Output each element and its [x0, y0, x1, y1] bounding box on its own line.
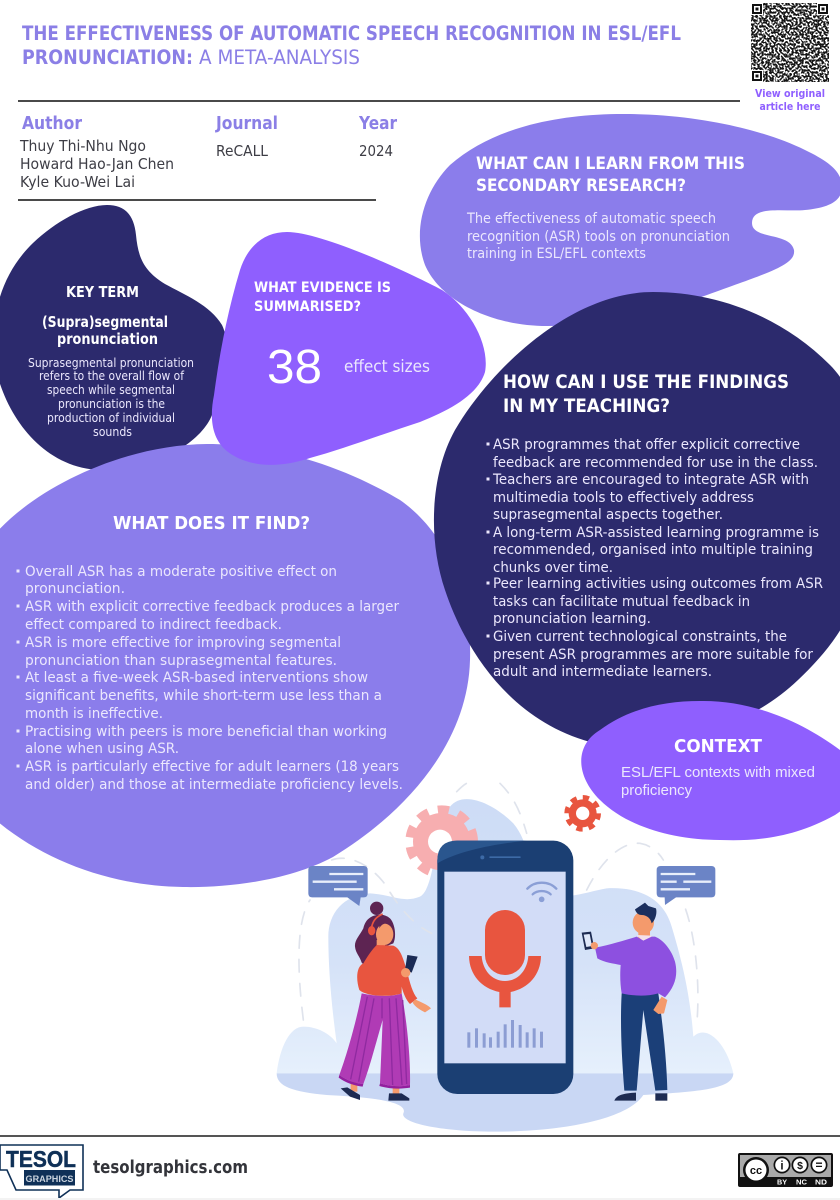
title: THE EFFECTIVENESS OF AUTOMATIC SPEECH RECOGNITION IN ESL/EFL — [22, 22, 681, 45]
findings list: ASR with explicit corrective feedback produces a larger — [25, 599, 399, 615]
panel: what can I learn: recognition (ASR) tools on pronunciation — [467, 229, 730, 245]
findings list: ASR is more effective for improving segmental — [25, 635, 341, 651]
metadata: journal: Journal — [215, 114, 278, 134]
teaching recommendations list: chunks over time. — [493, 560, 613, 576]
metadata: author — [19, 114, 174, 191]
QR caption: View original — [755, 87, 825, 100]
teaching recommendations list: Given current technological constraints, the — [493, 629, 787, 645]
metadata: author: Thuy Thi-Nhu Ngo — [19, 137, 146, 155]
teaching recommendations list: ASR programmes that offer explicit corrective — [493, 437, 800, 453]
panel: key term — [0, 205, 227, 470]
metadata: year — [358, 114, 397, 160]
website: tesolgraphics.com — [93, 1157, 248, 1178]
metadata: year: Year — [358, 114, 397, 134]
panel: what can I learn: The effectiveness of automatic speech — [466, 211, 716, 227]
panel: what evidence is summarised — [212, 232, 486, 465]
findings list: pronunciation. — [25, 581, 125, 597]
panel: what evidence is summarised: SUMMARISED? — [254, 299, 361, 315]
findings list: Practising with peers is more beneficial than working — [25, 724, 387, 740]
teaching recommendations list — [486, 437, 823, 680]
findings list: month is ineffective. — [25, 706, 163, 722]
logo: TESOL Graphics: TESOL — [6, 1146, 76, 1172]
title: PRONUNCIATION: — [22, 46, 193, 69]
teaching recommendations list: multimedia tools to effectively address — [493, 490, 754, 506]
panel: what can I learn: training in ESL/EFL contexts — [467, 246, 646, 262]
icon: microphone — [469, 910, 541, 1007]
findings list: and older) and those at intermediate proficiency levels. — [25, 777, 403, 793]
panel: what evidence is summarised: WHAT EVIDENCE IS — [254, 280, 391, 296]
smartphone — [437, 841, 573, 1094]
panel: how can I use the findings: HOW CAN I USE THE FINDINGS — [503, 372, 789, 393]
teaching recommendations list: pronunciation learning. — [493, 611, 651, 627]
panel: key term: pronunciation — [57, 331, 158, 348]
panel: key term: refers to the overall flow of — [39, 368, 184, 383]
panel: key term: pronunciation is the — [58, 396, 165, 411]
teaching recommendations list: present ASR programmes are more suitable for — [493, 647, 813, 663]
licence badge: CC BY-NC-ND: cc — [750, 1165, 762, 1177]
metadata: author: Kyle Kuo-Wei Lai — [20, 173, 135, 191]
panel: key term: production of individual — [47, 410, 175, 425]
findings list: ASR is particularly effective for adult learners (18 years — [25, 759, 399, 775]
QR code — [751, 3, 829, 82]
panel: what can I learn — [420, 114, 840, 326]
logo: TESOL Graphics — [0, 1145, 83, 1198]
panel: context: ESL/EFL contexts with mixed — [621, 765, 815, 781]
metadata: author: Howard Hao-Jan Chen — [20, 155, 174, 173]
panel: context: proficiency — [621, 783, 693, 799]
statistic: 38 effect sizes: effect sizes — [344, 357, 430, 377]
panel: how can I use the findings — [434, 292, 840, 746]
icon: pink gear — [409, 809, 474, 874]
figure: woman with headphones and phone — [339, 902, 431, 1101]
panel: key term: (Supra)segmental — [42, 314, 168, 331]
panel: key term: KEY TERM — [66, 284, 139, 301]
licence badge: CC BY-NC-ND: i — [780, 1160, 784, 1172]
title — [22, 22, 681, 69]
panel: how can I use the findings: IN MY TEACHING? — [503, 396, 670, 417]
metadata: journal: ReCALL — [216, 142, 268, 160]
findings list — [16, 564, 403, 793]
findings list: Overall ASR has a moderate positive effect on — [25, 564, 337, 580]
icon: left speech bubble — [308, 866, 368, 906]
panel: key term: speech while segmental — [47, 382, 175, 397]
background hills — [277, 799, 733, 1132]
panel: key term: Suprasegmental pronunciation — [28, 355, 194, 370]
teaching recommendations list: suprasegmental aspects together. — [493, 507, 723, 523]
licence badge: CC BY-NC-ND: NC — [796, 1180, 807, 1186]
teaching recommendations list: feedback are recommended for use in the class. — [493, 455, 818, 471]
statistic: 38 effect sizes — [267, 341, 430, 394]
illustration: people using speech recognition on a phone — [277, 783, 733, 1132]
teaching recommendations list: tasks can facilitate mutual feedback in — [493, 594, 750, 610]
findings list: significant benefits, while short-term use less than a — [25, 688, 382, 704]
licence badge: CC BY-NC-ND: $ — [797, 1160, 803, 1172]
findings list: At least a five-week ASR-based interventions show — [25, 670, 368, 686]
icon: wifi — [527, 883, 556, 901]
panel: what does it find — [0, 444, 470, 887]
QR caption: article here — [760, 100, 820, 113]
panel: context: CONTEXT — [674, 736, 763, 757]
panel: what does it find: WHAT DOES IT FIND? — [113, 513, 310, 534]
findings list: effect compared to indirect feedback. — [25, 617, 282, 633]
panel: what can I learn: SECONDARY RESEARCH? — [476, 176, 686, 196]
licence badge: CC BY-NC-ND — [738, 1153, 833, 1187]
licence badge: CC BY-NC-ND: ND — [815, 1180, 827, 1186]
metadata: year: 2024 — [359, 142, 393, 160]
figure: man holding phone — [582, 903, 676, 1101]
icon: red gear — [567, 797, 599, 829]
findings list: alone when using ASR. — [25, 741, 179, 757]
licence badge: CC BY-NC-ND: = — [815, 1158, 823, 1172]
icon: right speech bubble — [657, 866, 715, 905]
teaching recommendations list: Peer learning activities using outcomes from ASR — [493, 576, 823, 592]
panel: key term: sounds — [93, 424, 132, 439]
panel: what can I learn: WHAT CAN I LEARN FROM THIS — [476, 154, 745, 174]
QR caption — [755, 87, 825, 113]
metadata: journal — [215, 114, 278, 160]
title: A META-ANALYSIS — [199, 46, 360, 69]
dashed motion lines — [299, 783, 698, 1020]
panel: context — [581, 701, 840, 840]
metadata: author: Author — [22, 114, 82, 134]
findings list: pronunciation than suprasegmental features. — [25, 653, 337, 669]
statistic: 38 effect sizes: 38 — [267, 341, 322, 394]
licence badge: CC BY-NC-ND: BY — [777, 1180, 787, 1186]
audio level bars — [467, 1020, 543, 1048]
teaching recommendations list: adult and intermediate learners. — [493, 664, 712, 680]
teaching recommendations list: Teachers are encouraged to integrate ASR with — [492, 472, 809, 488]
logo: TESOL Graphics: GRAPHICS — [26, 1174, 74, 1185]
teaching recommendations list: A long-term ASR-assisted learning programme is — [493, 525, 819, 541]
teaching recommendations list: recommended, organised into multiple training — [493, 542, 813, 558]
